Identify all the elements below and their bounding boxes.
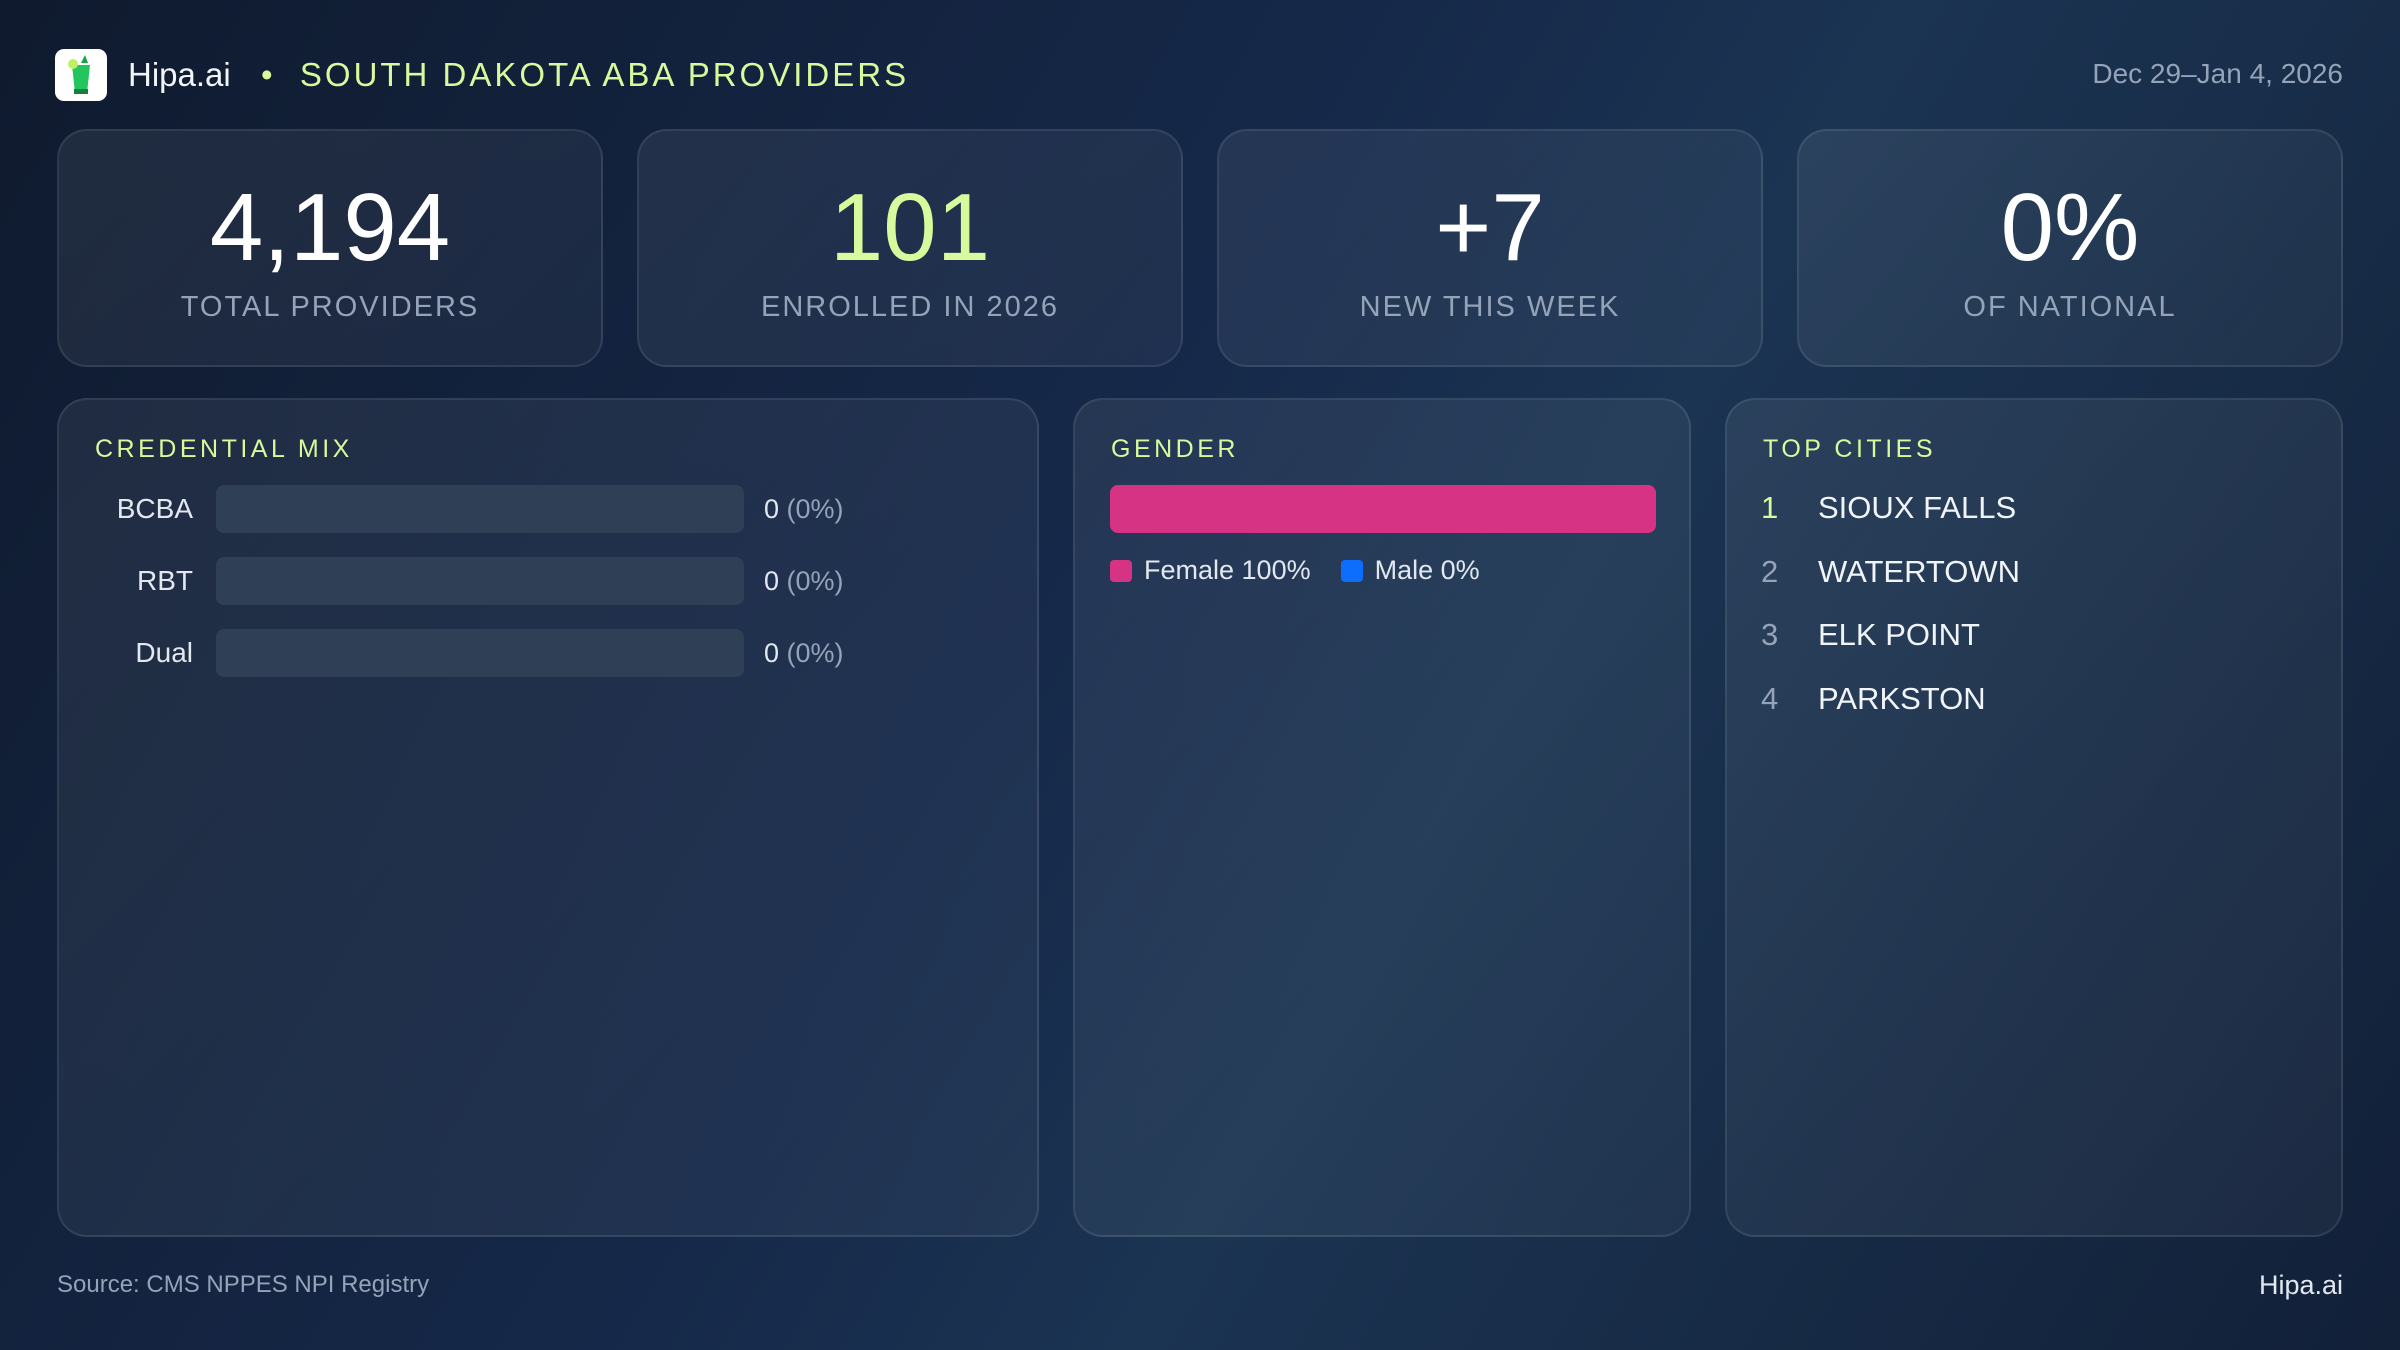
kpi: enrolled: 101 — [830, 174, 990, 281]
gender bar — [1110, 485, 1656, 533]
city 1: SIOUX FALLS — [1818, 490, 2016, 525]
kpi: new this week: +7 — [1435, 174, 1545, 281]
kpi: of national: 0% — [2001, 174, 2139, 281]
panel: credential mix — [57, 398, 1039, 1237]
city 1: 1 — [1761, 490, 1778, 525]
panel: top cities — [1725, 398, 2343, 1237]
heading: credential mix: CREDENTIAL MIX — [95, 435, 353, 463]
row: Dual — [135, 629, 844, 677]
row: RBT: 0 (0%) — [764, 566, 844, 596]
kpi: total providers: 4,194 — [210, 174, 450, 281]
heading: top cities: TOP CITIES — [1763, 435, 1936, 463]
kpi: of national: OF NATIONAL — [1963, 291, 2177, 323]
footer brand: Hipa.ai — [2259, 1270, 2343, 1300]
kpi: new this week: NEW THIS WEEK — [1360, 291, 1620, 323]
footer source: Source: CMS NPPES NPI Registry — [57, 1271, 429, 1298]
kpi: enrolled — [637, 129, 1183, 367]
row: Dual: 0 (0%) — [764, 638, 844, 668]
city 4: 4 — [1761, 681, 1778, 716]
city 2: 2 — [1761, 554, 1778, 589]
row: BCBA: 0 (0%) — [764, 494, 844, 524]
legend: Female 100% Male 0% — [1144, 555, 1480, 585]
icon: logo — [55, 49, 107, 101]
kpi: total providers — [57, 129, 603, 367]
kpi: new this week — [1217, 129, 1763, 367]
header — [55, 49, 909, 101]
title: • SOUTH DAKOTA ABA PROVIDERS — [261, 56, 909, 93]
kpi: enrolled: ENROLLED IN 2026 — [761, 291, 1059, 323]
row: RBT: RBT — [137, 565, 193, 596]
city 3: 3 — [1761, 617, 1778, 652]
city 4: PARKSTON — [1818, 681, 1986, 716]
panel: gender — [1073, 398, 1691, 1237]
kpi: total providers: TOTAL PROVIDERS — [181, 291, 479, 323]
city 3: ELK POINT — [1818, 617, 1980, 652]
brand name: Hipa.ai — [128, 56, 231, 93]
row: BCBA — [117, 485, 844, 533]
date range: Dec 29–Jan 4, 2026 — [2092, 58, 2343, 89]
row: Dual: Dual — [135, 637, 193, 668]
heading: gender: GENDER — [1111, 435, 1239, 463]
row: BCBA: BCBA — [117, 493, 193, 524]
kpi: of national — [1797, 129, 2343, 367]
row: RBT — [137, 557, 844, 605]
city 2: WATERTOWN — [1818, 554, 2020, 589]
